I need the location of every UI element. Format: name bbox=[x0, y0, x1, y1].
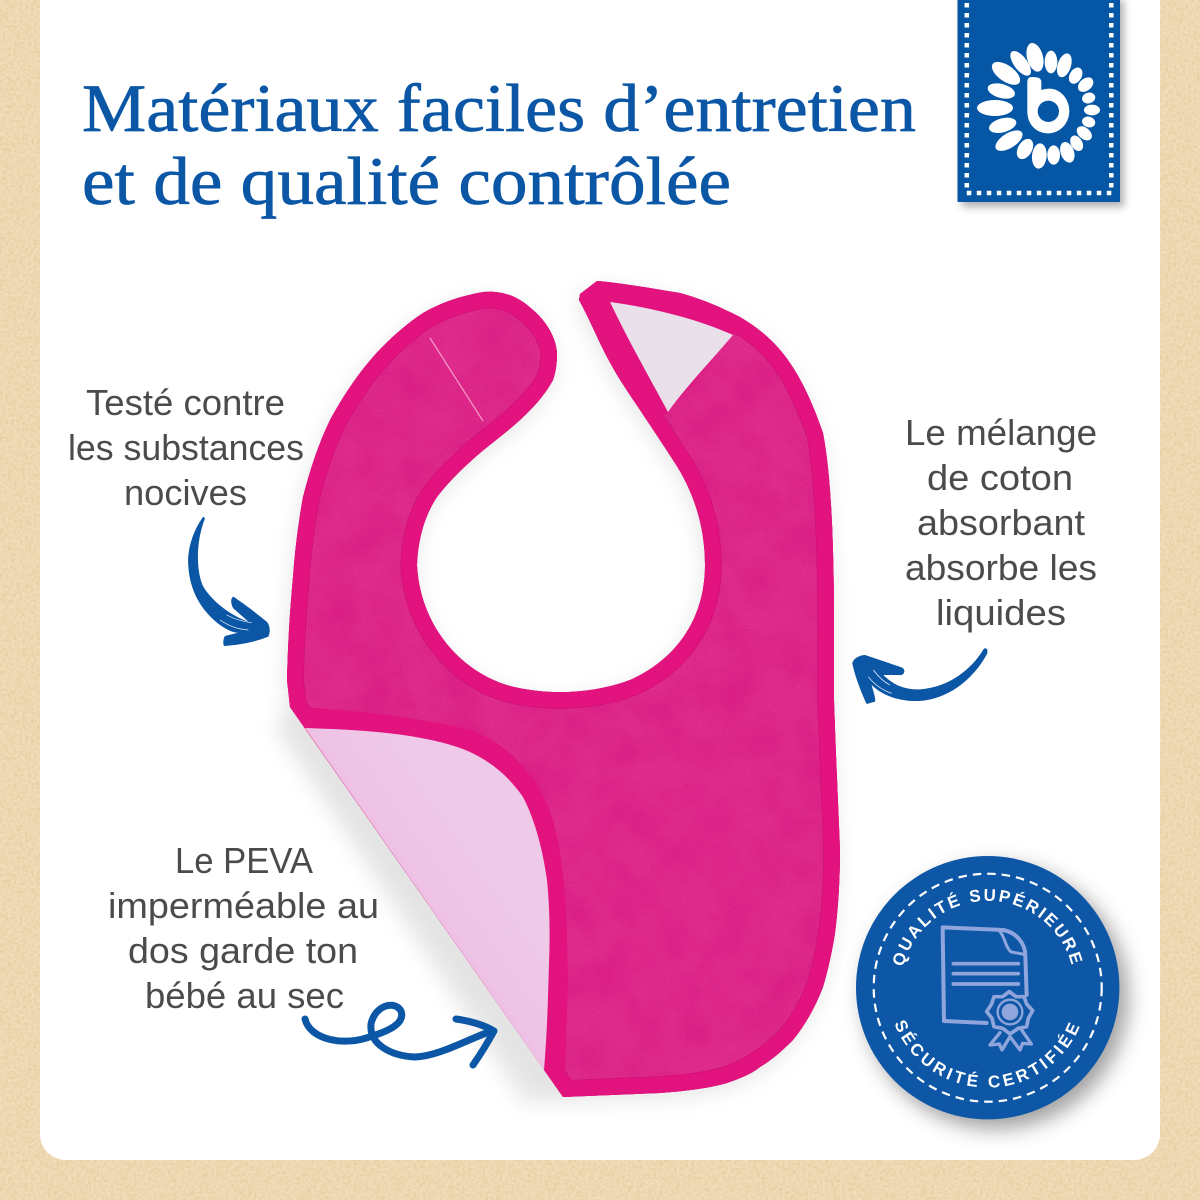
icon: certificate with rosette bbox=[943, 927, 1033, 1050]
text: cotton blend bbox=[905, 412, 1097, 633]
folded corner binding bbox=[290, 707, 568, 1097]
text: cotton blend: absorbant bbox=[917, 502, 1085, 543]
icon: brand logo flower bbox=[977, 41, 1100, 169]
title: et de qualité contrôlée bbox=[82, 143, 731, 219]
text: cotton blend: Le mélange bbox=[905, 412, 1097, 453]
badge: quality seal bbox=[851, 852, 1141, 1142]
text: tested bbox=[68, 382, 304, 513]
text: PEVA: dos garde ton bbox=[128, 930, 358, 971]
title: Matériaux faciles d’entretien bbox=[82, 70, 916, 146]
tab binding bbox=[598, 281, 744, 415]
arrow: PEVA loop to lining bbox=[305, 1005, 494, 1065]
badge text bottom: SÉCURITÉ CERTIFIÉE bbox=[896, 1020, 1080, 1088]
bib photo bbox=[275, 275, 850, 1105]
text: cotton blend: liquides bbox=[936, 592, 1066, 633]
text: PEVA: imperméable au bbox=[108, 885, 379, 926]
text: PEVA bbox=[108, 840, 379, 1016]
bib shadow bbox=[285, 287, 838, 1103]
bib binding edge bbox=[287, 281, 840, 1097]
brand label tag bbox=[958, 0, 1124, 207]
bib binding seam bbox=[287, 281, 840, 1097]
text: PEVA: bébé au sec bbox=[145, 975, 344, 1016]
title bbox=[82, 70, 916, 219]
text: tested: Testé contre bbox=[86, 382, 285, 423]
badge text top: QUALITÉ SUPÉRIEURE bbox=[893, 889, 1083, 965]
strap seam bbox=[430, 338, 483, 421]
velcro patch bbox=[610, 302, 733, 412]
folded corner waterproof lining bbox=[305, 728, 550, 1070]
fold shadow bbox=[275, 707, 563, 1105]
arrow: tested to bib bbox=[188, 517, 270, 646]
bib terry body bbox=[287, 281, 840, 1097]
text: PEVA: Le PEVA bbox=[175, 840, 313, 881]
arrow: cotton blend to bib bbox=[852, 648, 987, 704]
text: cotton blend: de coton bbox=[927, 457, 1073, 498]
text: cotton blend: absorbe les bbox=[905, 547, 1097, 588]
text: tested: les substances bbox=[68, 427, 304, 468]
text: tested: nocives bbox=[124, 472, 247, 513]
